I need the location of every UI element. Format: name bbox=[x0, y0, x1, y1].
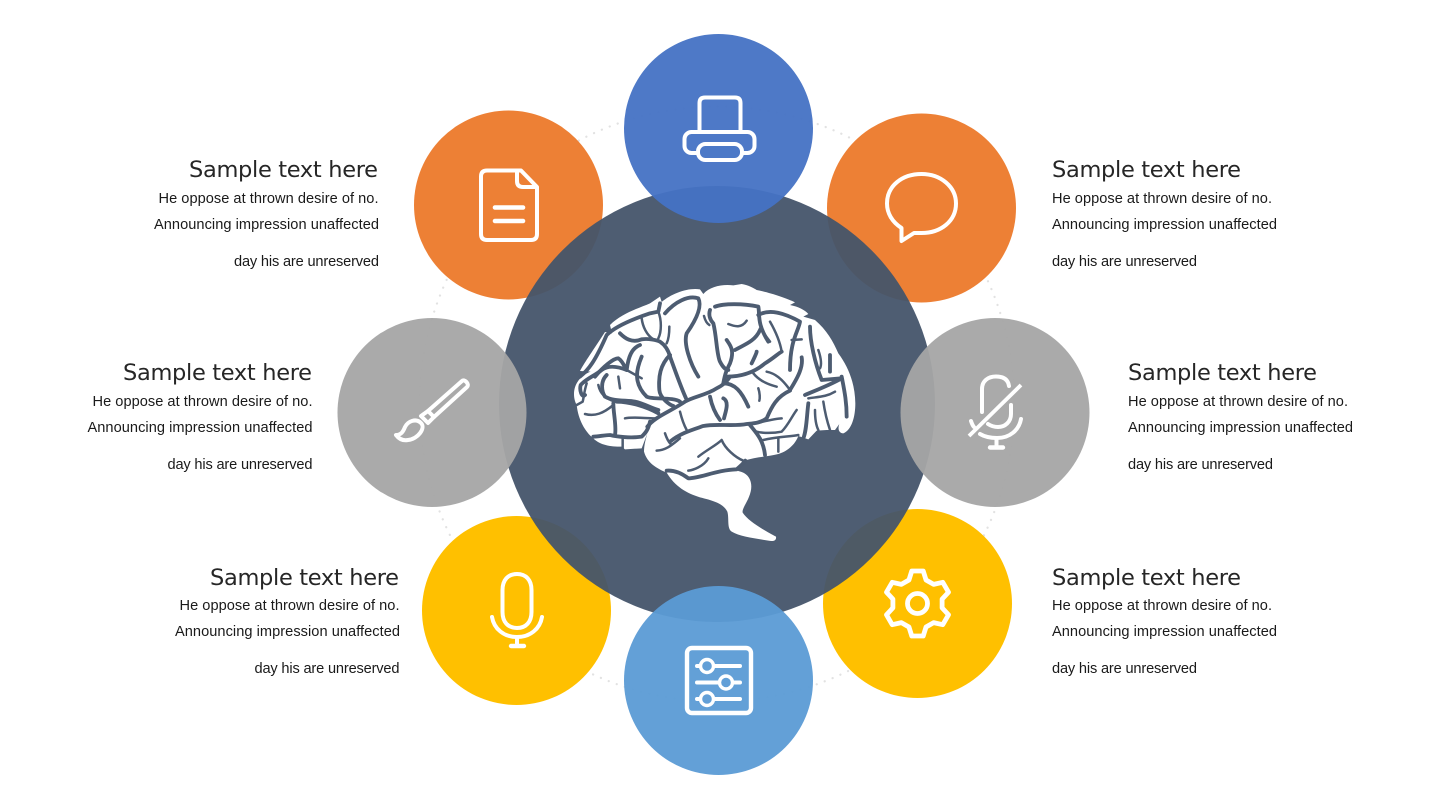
icon: printer bbox=[684, 98, 754, 160]
text block: middle right: Sample text here bbox=[1128, 360, 1317, 386]
text block: lower left: Sample text here bbox=[210, 565, 399, 591]
dotted ring bbox=[420, 106, 1014, 702]
text block: lower right: He oppose at thrown desire of no. bbox=[1052, 598, 1272, 614]
text block: middle left: He oppose at thrown desire of no. bbox=[92, 394, 312, 410]
circle: right grey bbox=[900, 318, 1090, 507]
text block: lower left bbox=[175, 565, 400, 677]
text block: upper left: He oppose at thrown desire of no. bbox=[158, 191, 378, 207]
text block: lower left: He oppose at thrown desire of no. bbox=[180, 598, 400, 614]
circle: lower right yellow bbox=[823, 509, 1012, 698]
icon: paint brush bbox=[396, 380, 468, 440]
text block: upper right: He oppose at thrown desire of no. bbox=[1052, 191, 1272, 207]
text block: lower left: day his are unreserved bbox=[254, 661, 400, 677]
text block: upper left bbox=[154, 157, 379, 270]
circle: top blue bbox=[624, 34, 813, 223]
text block: middle right: day his are unreserved bbox=[1128, 457, 1273, 473]
text block: upper left: day his are unreserved bbox=[234, 254, 379, 270]
text block: middle right bbox=[1128, 360, 1353, 473]
text block: middle left: Announcing impression unaffected bbox=[88, 420, 312, 436]
text block: upper right: day his are unreserved bbox=[1052, 254, 1197, 270]
text block: middle right: He oppose at thrown desire of no. bbox=[1128, 394, 1348, 410]
icon: gear bbox=[886, 571, 948, 636]
circle: lower left yellow bbox=[422, 516, 611, 705]
text block: lower left: Announcing impression unaffected bbox=[175, 624, 400, 640]
circle: bottom light blue bbox=[624, 586, 813, 775]
text block: middle left bbox=[88, 360, 312, 473]
text block: upper right bbox=[1052, 157, 1277, 270]
icon: microphone bbox=[492, 574, 542, 646]
text block: middle left: day his are unreserved bbox=[168, 457, 312, 473]
text block: lower right: Announcing impression unaffected bbox=[1052, 624, 1277, 640]
text block: upper right: Announcing impression unaffected bbox=[1052, 217, 1277, 233]
text block: middle right: Announcing impression unaffected bbox=[1128, 420, 1353, 436]
icon: speech bubble bbox=[887, 174, 956, 241]
icon: document bbox=[481, 170, 537, 240]
text block: upper right: Sample text here bbox=[1052, 157, 1241, 183]
icon: brain bbox=[574, 284, 855, 541]
circle: upper right orange bbox=[827, 114, 1016, 302]
icon: muted microphone bbox=[969, 376, 1021, 448]
text block: lower right: day his are unreserved bbox=[1052, 661, 1197, 677]
text block: middle left: Sample text here bbox=[123, 360, 312, 386]
text block: upper left: Announcing impression unaffected bbox=[154, 217, 379, 233]
circle: left grey bbox=[338, 318, 526, 507]
text block: lower right: Sample text here bbox=[1052, 565, 1241, 591]
text block: lower right bbox=[1052, 565, 1277, 677]
central circle bbox=[499, 186, 935, 622]
text block: upper left: Sample text here bbox=[189, 157, 378, 183]
icon: sliders panel bbox=[687, 648, 751, 713]
circle: upper left orange bbox=[414, 110, 603, 300]
